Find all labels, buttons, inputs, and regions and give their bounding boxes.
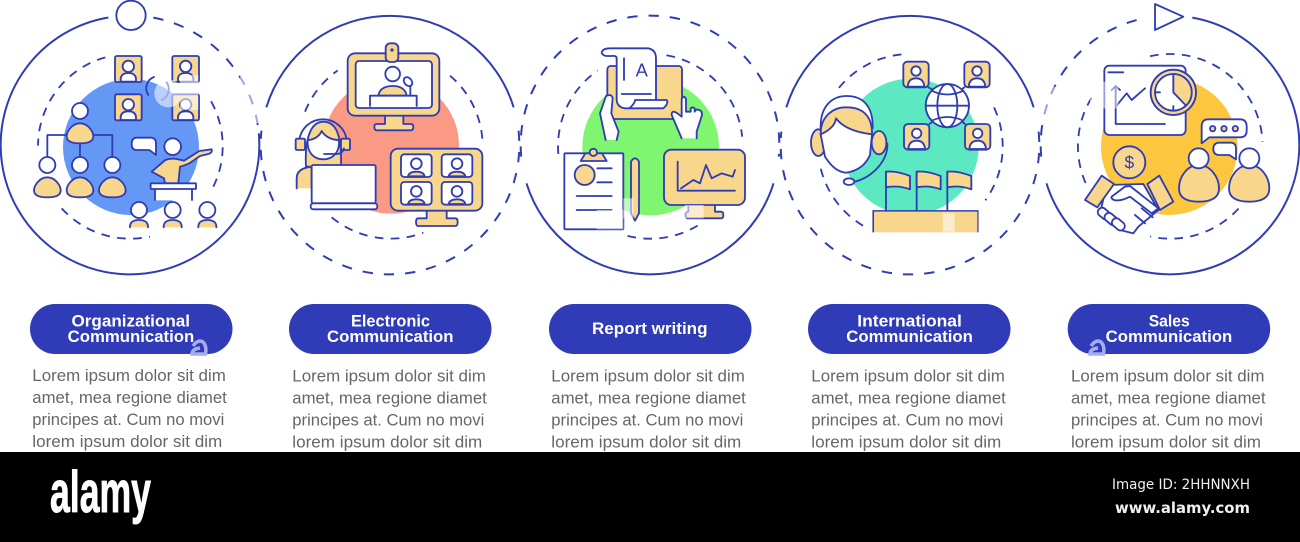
agent with headset and laptop	[296, 119, 377, 209]
panel: international communication icon	[781, 16, 1039, 274]
dollar coin	[1113, 146, 1145, 178]
heading: sales communication	[1068, 304, 1270, 354]
chart monitor	[664, 150, 745, 218]
pencil	[631, 158, 639, 221]
text block: sales communication: amet, mea regione diamet	[1071, 390, 1266, 408]
heading: report writing	[549, 304, 752, 354]
text block: report writing: lorem ipsum dolor sit dim	[551, 434, 741, 452]
video call tiles	[115, 56, 199, 120]
presenter at podium	[132, 138, 212, 200]
text block: international communication: lorem ipsum dolor sit dim	[811, 434, 1001, 452]
heading: electronic communication	[289, 304, 492, 354]
watermark overlay	[597, 198, 704, 229]
inner dashed ring	[1078, 54, 1263, 239]
audience	[130, 202, 216, 227]
image id: Image ID: 2HHNNXH	[1112, 477, 1250, 493]
end marker triangle	[1155, 4, 1183, 30]
watermark overlay	[1040, 82, 1118, 123]
text block: electronic communication: lorem ipsum dolor sit dim	[292, 434, 482, 452]
panel: organizational communication icon	[1, 1, 260, 274]
text block: organizational communication: lorem ipsum dolor sit dim	[32, 433, 222, 451]
panel: sales communication icon	[1040, 4, 1299, 274]
text block: international communication: Lorem ipsum dolor sit dim	[811, 368, 1005, 386]
heading: organizational communication	[30, 304, 232, 354]
headset operator	[811, 96, 887, 185]
panel: electronic communication icon	[261, 16, 519, 274]
heading: report writing: Report writing	[592, 320, 708, 338]
text block: international communication	[811, 368, 1006, 452]
panel: report writing icon	[521, 16, 779, 274]
inner dashed ring	[558, 55, 742, 239]
text block: international communication: amet, mea regione diamet	[811, 390, 1006, 408]
dollar coin: $	[1125, 153, 1135, 173]
clipboard	[564, 149, 623, 229]
text block: report writing: Lorem ipsum dolor sit dim	[551, 368, 745, 386]
watermark overlay	[154, 73, 260, 123]
watermark overlay	[943, 213, 955, 232]
text block: electronic communication: principes at. Cum no movi	[292, 412, 484, 430]
text block: sales communication: Lorem ipsum dolor sit dim	[1071, 368, 1264, 386]
handshake	[1085, 176, 1173, 233]
heading: electronic communication: Communication	[327, 328, 454, 346]
text block: electronic communication: Lorem ipsum dolor sit dim	[292, 368, 486, 386]
inner dashed ring	[820, 54, 1003, 226]
text block: organizational communication	[32, 367, 227, 451]
footer band	[0, 452, 1300, 542]
website: www.alamy.com	[1115, 499, 1250, 517]
text block: report writing: amet, mea regione diamet	[551, 390, 746, 408]
heading: sales communication: Communication	[1106, 328, 1232, 346]
flags on stand	[873, 172, 978, 232]
text block: international communication: principes at. Cum no movi	[811, 412, 1003, 430]
group call monitor	[391, 149, 482, 226]
heading: organizational communication: Organizational	[72, 312, 190, 330]
text block: report writing: principes at. Cum no movi	[551, 412, 743, 430]
text block: sales communication: lorem ipsum dolor sit dim	[1071, 434, 1261, 452]
heading: international communication	[808, 304, 1010, 354]
alamy logo: alamy	[50, 460, 151, 525]
hands	[600, 95, 702, 140]
profile tiles and globe	[903, 62, 990, 150]
text block: sales communication	[1071, 368, 1266, 452]
chart panel with clock	[1104, 66, 1196, 135]
two people talking	[1179, 119, 1269, 202]
heading: organizational communication: Communication	[68, 328, 194, 346]
heading: international communication: Communication	[846, 328, 973, 346]
text block: organizational communication: amet, mea regione diamet	[32, 389, 227, 407]
text block: electronic communication	[292, 368, 487, 452]
document on tablet: A	[636, 60, 649, 81]
heading: international communication: International	[857, 312, 962, 330]
document on tablet	[602, 48, 682, 119]
heading: sales communication: Sales	[1149, 312, 1190, 330]
text block: electronic communication: amet, mea regione diamet	[292, 390, 487, 408]
heading: electronic communication: Electronic	[351, 312, 430, 330]
text block: sales communication: principes at. Cum no movi	[1071, 412, 1263, 430]
org chart	[34, 103, 126, 197]
inner dashed ring	[38, 57, 223, 239]
top monitor with speaker	[348, 43, 439, 130]
text block: organizational communication: Lorem ipsum dolor sit dim	[32, 367, 226, 385]
start marker circle	[116, 1, 146, 30]
inner dashed ring	[305, 70, 482, 239]
text block: report writing	[551, 368, 746, 452]
text block: organizational communication: principes at. Cum no movi	[32, 411, 224, 429]
